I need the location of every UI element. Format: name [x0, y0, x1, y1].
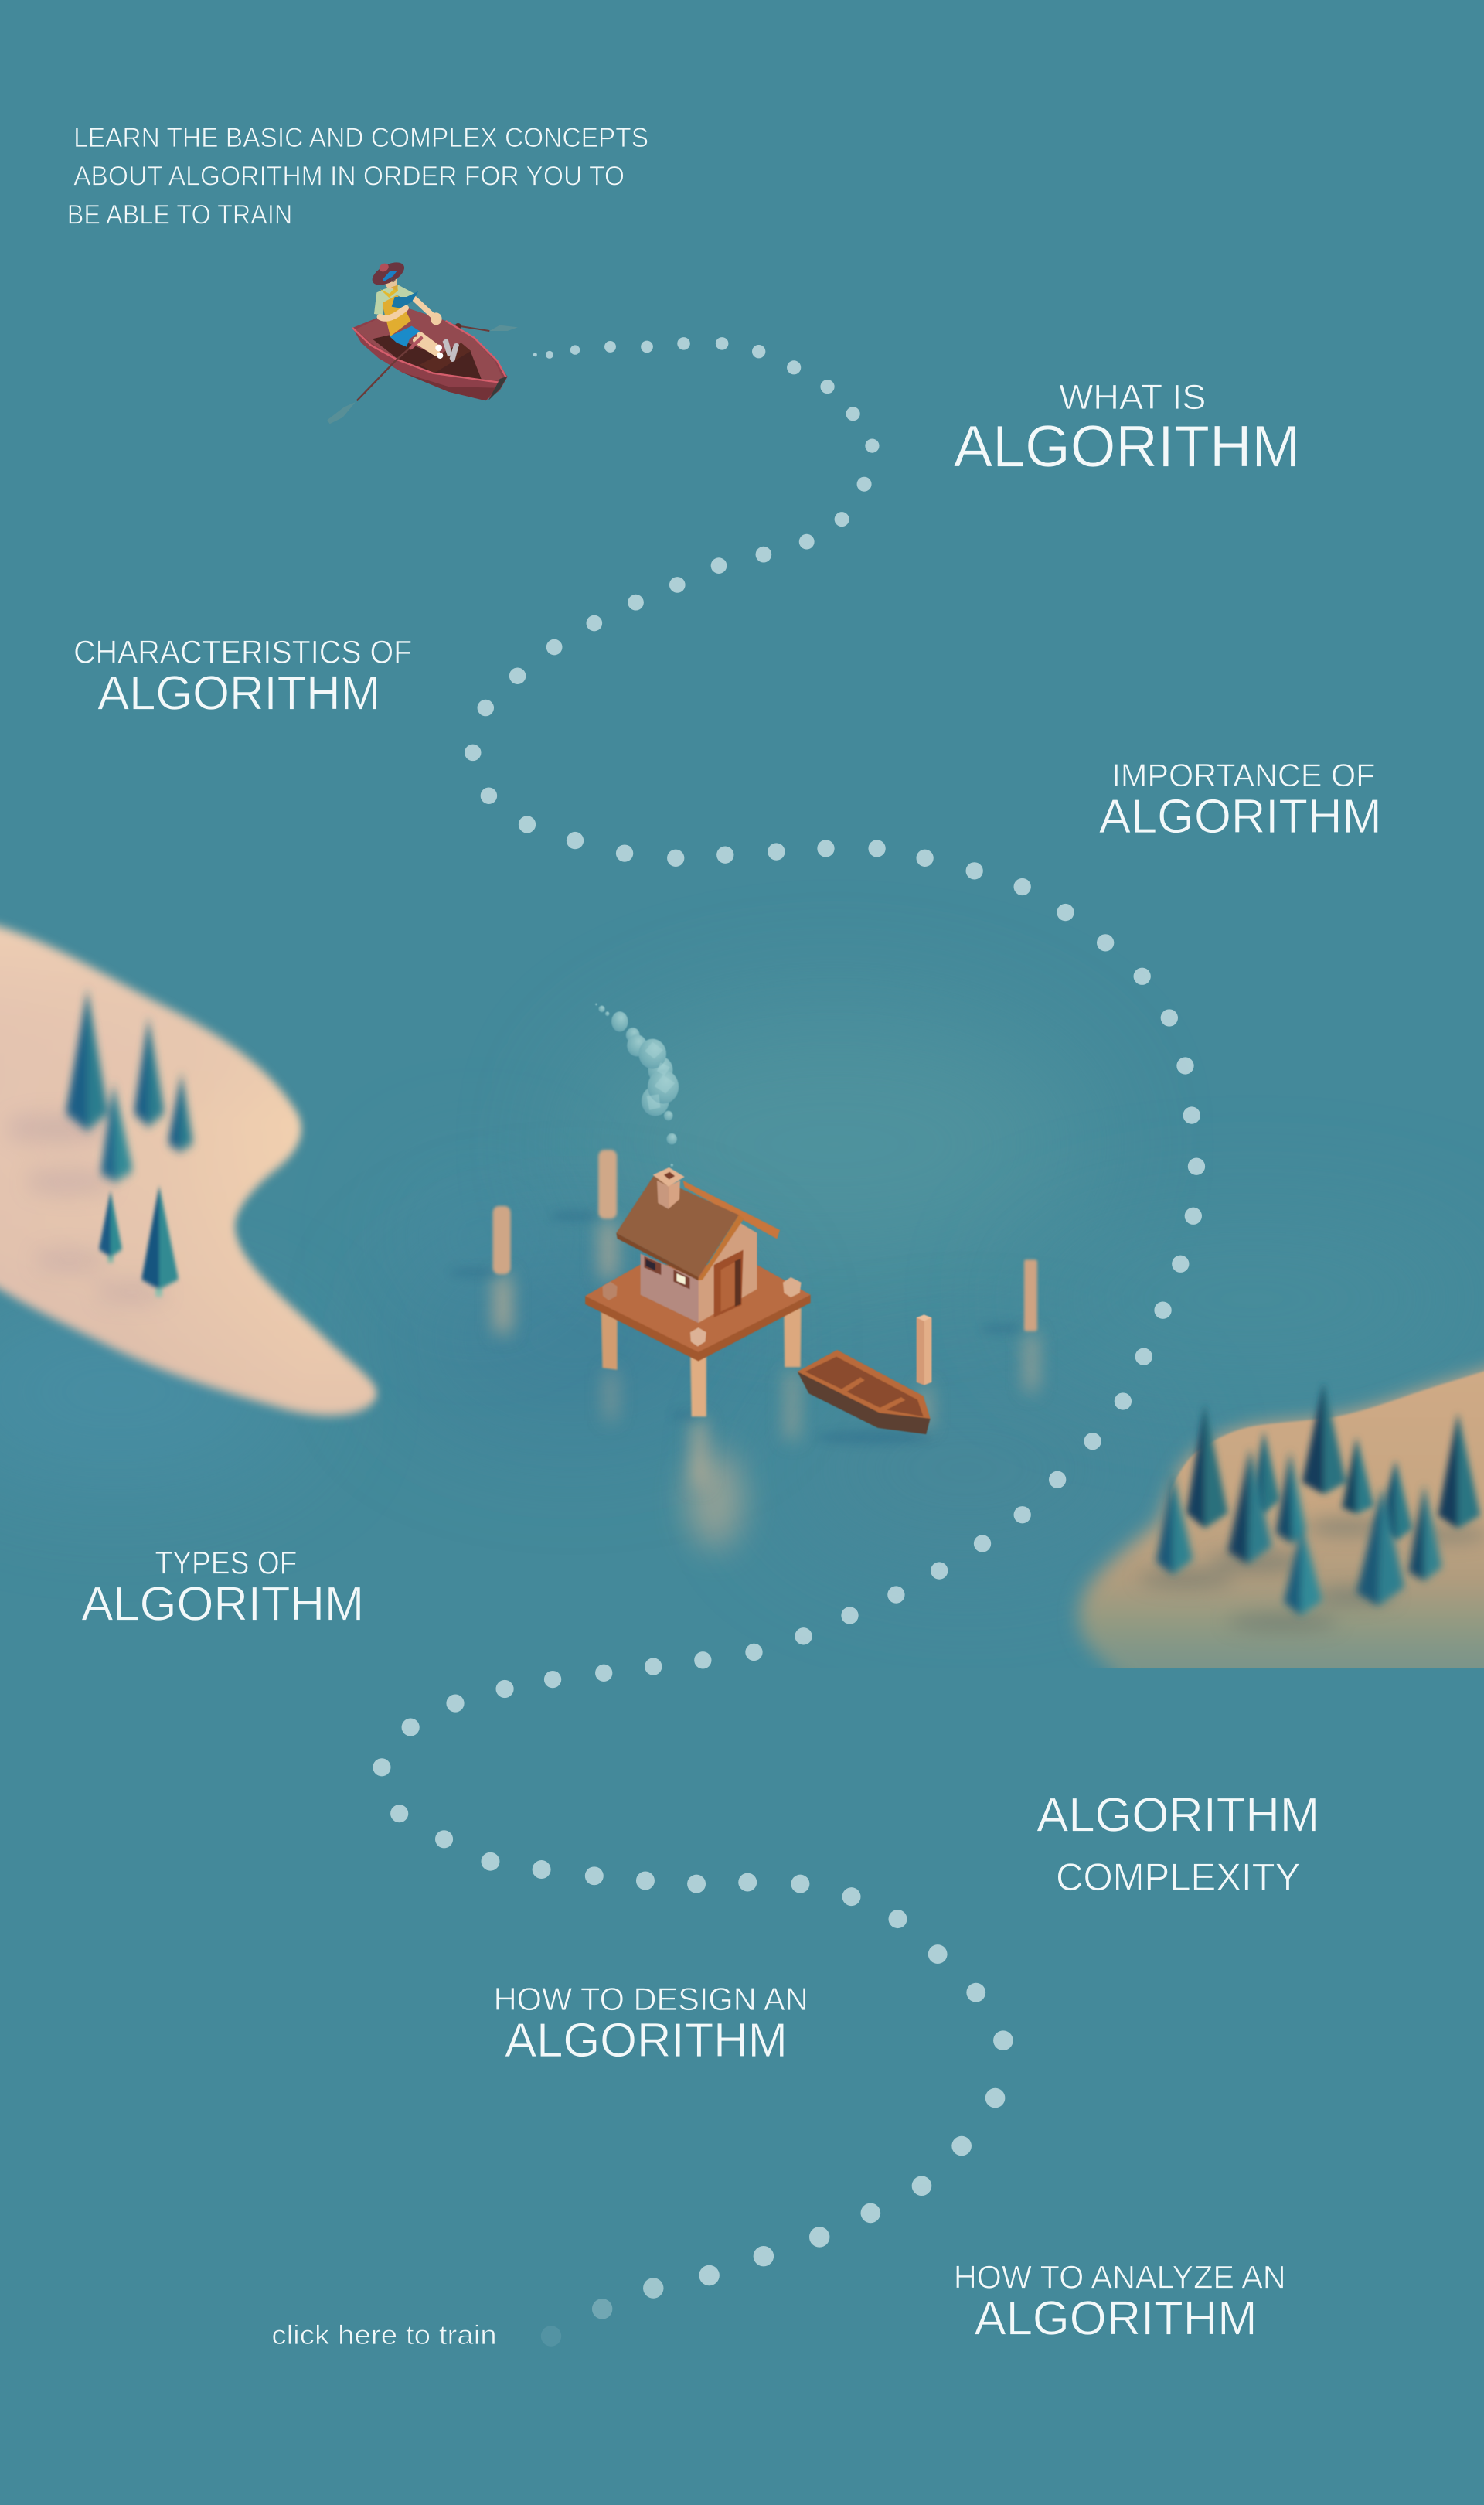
small moored boat	[798, 1350, 931, 1434]
rowing boat with reader	[327, 257, 518, 424]
hat brim	[369, 257, 408, 290]
back trees	[66, 990, 193, 1182]
shoes	[443, 339, 452, 357]
heading: importance of algorithm: ALGORITHM	[1099, 790, 1382, 844]
right sand island with trees	[1079, 1365, 1484, 1693]
tree shadows	[1139, 1518, 1484, 1631]
far oar	[441, 322, 518, 331]
boat rim	[352, 321, 506, 383]
back trees	[1186, 1382, 1480, 1541]
island crisp top edge	[1170, 1370, 1484, 1501]
island soft body	[1079, 1365, 1484, 1693]
island shape	[0, 922, 377, 1416]
glasses	[391, 278, 395, 281]
legs	[416, 335, 437, 353]
heading: algorithm complexity	[1036, 1788, 1319, 1899]
heading: characteristics of algorithm: CHARACTERISTICS OF	[73, 635, 412, 670]
boat floor and seats	[373, 335, 482, 380]
roof verge	[698, 1215, 744, 1280]
tree shadows	[4, 1116, 170, 1300]
head	[385, 274, 397, 289]
back roof strip	[682, 1181, 780, 1239]
heading: importance of algorithm: IMPORTANCE OF	[1111, 758, 1375, 793]
platform cubes	[602, 1277, 802, 1347]
call to action: click here to train	[271, 2320, 497, 2350]
water shadows	[450, 1211, 1023, 1444]
background water	[656, 1058, 1014, 1231]
house	[616, 1167, 780, 1323]
chimney	[653, 1167, 685, 1209]
heading: how to design an algorithm: ALGORITHM	[505, 2014, 788, 2067]
reader	[369, 257, 459, 362]
heading: importance of algorithm	[1099, 758, 1382, 844]
broad water reflection	[686, 1450, 744, 1548]
heading: types of algorithm	[81, 1546, 364, 1631]
stilts	[601, 1308, 802, 1416]
heading: what is algorithm: ALGORITHM	[954, 414, 1300, 479]
shirt sleeves	[374, 285, 415, 315]
intro text: ABOUT ALGORITHM IN ORDER FOR YOU TO	[73, 162, 625, 192]
heading: algorithm complexity: ALGORITHM	[1036, 1788, 1319, 1842]
lit window	[673, 1270, 689, 1289]
shirt yellow	[382, 294, 411, 336]
heading: what is algorithm: WHAT IS	[1059, 377, 1206, 417]
dotted route	[373, 337, 1205, 2347]
right post	[917, 1314, 931, 1385]
hat crown	[378, 262, 390, 273]
heading: how to design an algorithm: HOW TO DESIGN AN	[494, 1982, 808, 2017]
heading: how to analyze an algorithm: HOW TO ANALYZE AN	[954, 2260, 1286, 2295]
heading: characteristics of algorithm: ALGORITHM	[97, 667, 380, 721]
intro text: BE ABLE TO TRAIN	[67, 199, 292, 230]
heading: what is algorithm	[954, 377, 1300, 479]
chimney smoke	[595, 1004, 679, 1167]
arms	[380, 308, 406, 319]
book	[392, 291, 418, 308]
dark window	[644, 1256, 661, 1275]
intro text: LEARN THE BASIC AND COMPLEX CONCEPTS	[73, 123, 648, 153]
left sand island with trees	[0, 922, 377, 1416]
hull interior	[356, 308, 504, 380]
heading: algorithm complexity: COMPLEXITY	[1056, 1856, 1300, 1899]
heading: how to analyze an algorithm	[954, 2260, 1286, 2345]
heading: types of algorithm: ALGORITHM	[81, 1578, 364, 1631]
water reflections	[494, 1222, 1038, 1484]
right wall	[699, 1222, 757, 1323]
intro text	[67, 123, 648, 230]
platform	[585, 1265, 811, 1362]
main roof	[616, 1176, 739, 1277]
near oar	[327, 338, 421, 424]
front trees	[99, 1186, 179, 1297]
hull	[352, 308, 508, 400]
shorts	[390, 326, 420, 347]
wooden posts	[492, 1150, 1037, 1331]
central stilt house scene	[450, 1004, 1038, 1548]
door	[714, 1250, 744, 1317]
heading: how to design an algorithm	[494, 1982, 808, 2067]
heading: types of algorithm: TYPES OF	[155, 1546, 297, 1581]
hat band	[383, 271, 397, 281]
left wall	[641, 1253, 699, 1323]
heading: how to analyze an algorithm: ALGORITHM	[975, 2292, 1257, 2345]
text labels	[67, 123, 1382, 2350]
mid trees	[1156, 1448, 1442, 1616]
heading: characteristics of algorithm	[73, 635, 412, 721]
